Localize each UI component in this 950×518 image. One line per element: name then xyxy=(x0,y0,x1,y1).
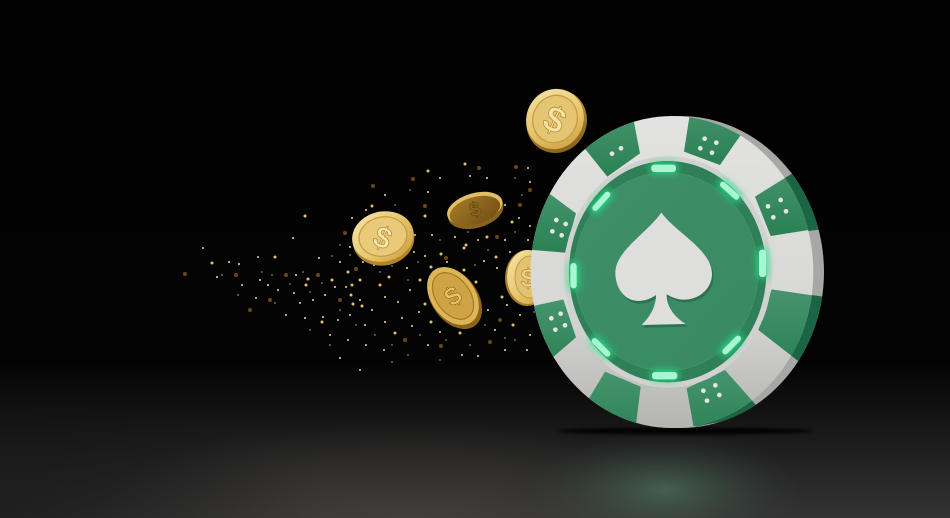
dollar sign: $ xyxy=(438,279,468,312)
rim dots xyxy=(549,136,788,403)
chip side edge xyxy=(537,116,824,428)
dollar sign: $ xyxy=(537,97,573,142)
coin: top right xyxy=(515,79,597,163)
LED lights xyxy=(569,163,768,381)
dark green edge sections xyxy=(696,174,822,427)
dollar sign: $ xyxy=(467,198,484,222)
poker chip xyxy=(530,116,824,428)
dollar sign: $ xyxy=(368,220,397,257)
chip face white xyxy=(531,116,813,428)
inner green groove xyxy=(569,161,766,382)
inner green disc xyxy=(574,172,758,371)
coin: lower xyxy=(416,257,493,339)
floor warm light xyxy=(90,418,730,518)
coin: flat dark xyxy=(443,186,508,235)
gold particles xyxy=(185,164,534,370)
coin: left xyxy=(347,206,419,271)
dollar sign: $ xyxy=(521,263,536,293)
LED glow xyxy=(569,163,768,381)
floor left shading xyxy=(0,400,320,518)
chip contact shadow xyxy=(557,428,813,434)
green rim segments xyxy=(532,117,812,426)
floor reflection xyxy=(530,432,800,518)
spade symbol xyxy=(615,213,714,328)
inner ring xyxy=(564,156,772,388)
coin: behind chip xyxy=(505,250,549,306)
